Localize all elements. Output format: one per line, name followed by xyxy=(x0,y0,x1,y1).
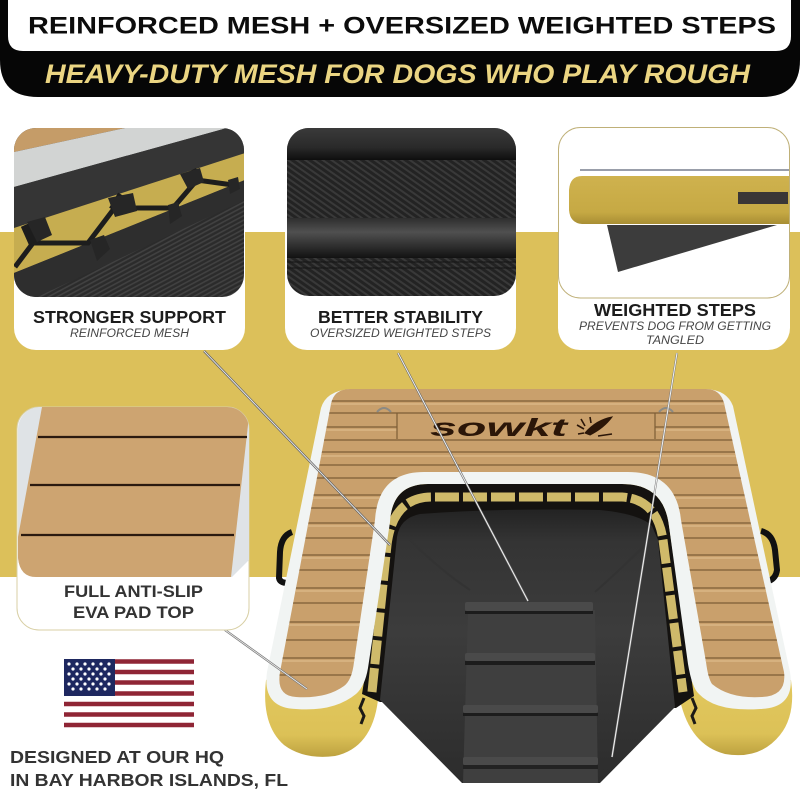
heading: FULL ANTI-SLIP xyxy=(64,583,203,601)
wood deck top xyxy=(260,385,800,705)
panel: weighted steps xyxy=(558,127,790,350)
panel: eva pad: EVA PAD TOP xyxy=(73,604,194,622)
heading: WEIGHTED STEPS xyxy=(594,300,756,320)
subtext: PREVENTS DOG FROM GETTING xyxy=(579,321,771,333)
heading: STRONGER SUPPORT xyxy=(33,307,226,327)
leader line: weighted xyxy=(612,353,677,757)
designed in text: IN BAY HARBOR ISLANDS, FL xyxy=(10,770,288,790)
left yellow pontoon xyxy=(265,670,378,757)
panel: eva pad xyxy=(17,407,250,630)
background band xyxy=(0,232,800,577)
skirt folds xyxy=(410,540,645,592)
icon: american flag xyxy=(64,659,194,728)
designed in text xyxy=(10,747,288,790)
logo mark xyxy=(577,417,612,436)
mesh closeup image xyxy=(14,128,245,298)
designed in text: DESIGNED AT OUR HQ xyxy=(10,747,224,767)
panel: stronger support xyxy=(14,128,245,350)
side view image xyxy=(569,170,790,272)
leader line: pad xyxy=(225,630,307,689)
right yellow pontoon xyxy=(680,670,792,755)
leader line: steps xyxy=(398,353,528,601)
white deck rim xyxy=(266,389,791,709)
subtext: OVERSIZED WEIGHTED STEPS xyxy=(310,328,491,340)
mesh band xyxy=(360,484,696,724)
left handle xyxy=(279,532,292,583)
heading: BETTER STABILITY xyxy=(318,307,483,327)
leader line: mesh xyxy=(204,351,390,545)
D-rings xyxy=(377,408,673,412)
subtitle: HEAVY-DUTY MESH FOR DOGS WHO PLAY ROUGH xyxy=(45,59,751,89)
fabric closeup image xyxy=(285,128,517,298)
main title: REINFORCED MESH + OVERSIZED WEIGHTED STEPS xyxy=(28,12,776,40)
panel: better stability xyxy=(285,128,517,350)
product: inflatable dock xyxy=(260,385,800,783)
weighted steps xyxy=(463,602,598,783)
header banner xyxy=(0,0,800,97)
right handle xyxy=(761,531,777,581)
wood closeup image xyxy=(17,407,250,577)
black skirt xyxy=(380,510,675,783)
panel: weighted steps: TANGLED xyxy=(646,335,704,347)
sowkt logo: sowkt xyxy=(430,414,570,442)
subtext: REINFORCED MESH xyxy=(70,328,190,340)
